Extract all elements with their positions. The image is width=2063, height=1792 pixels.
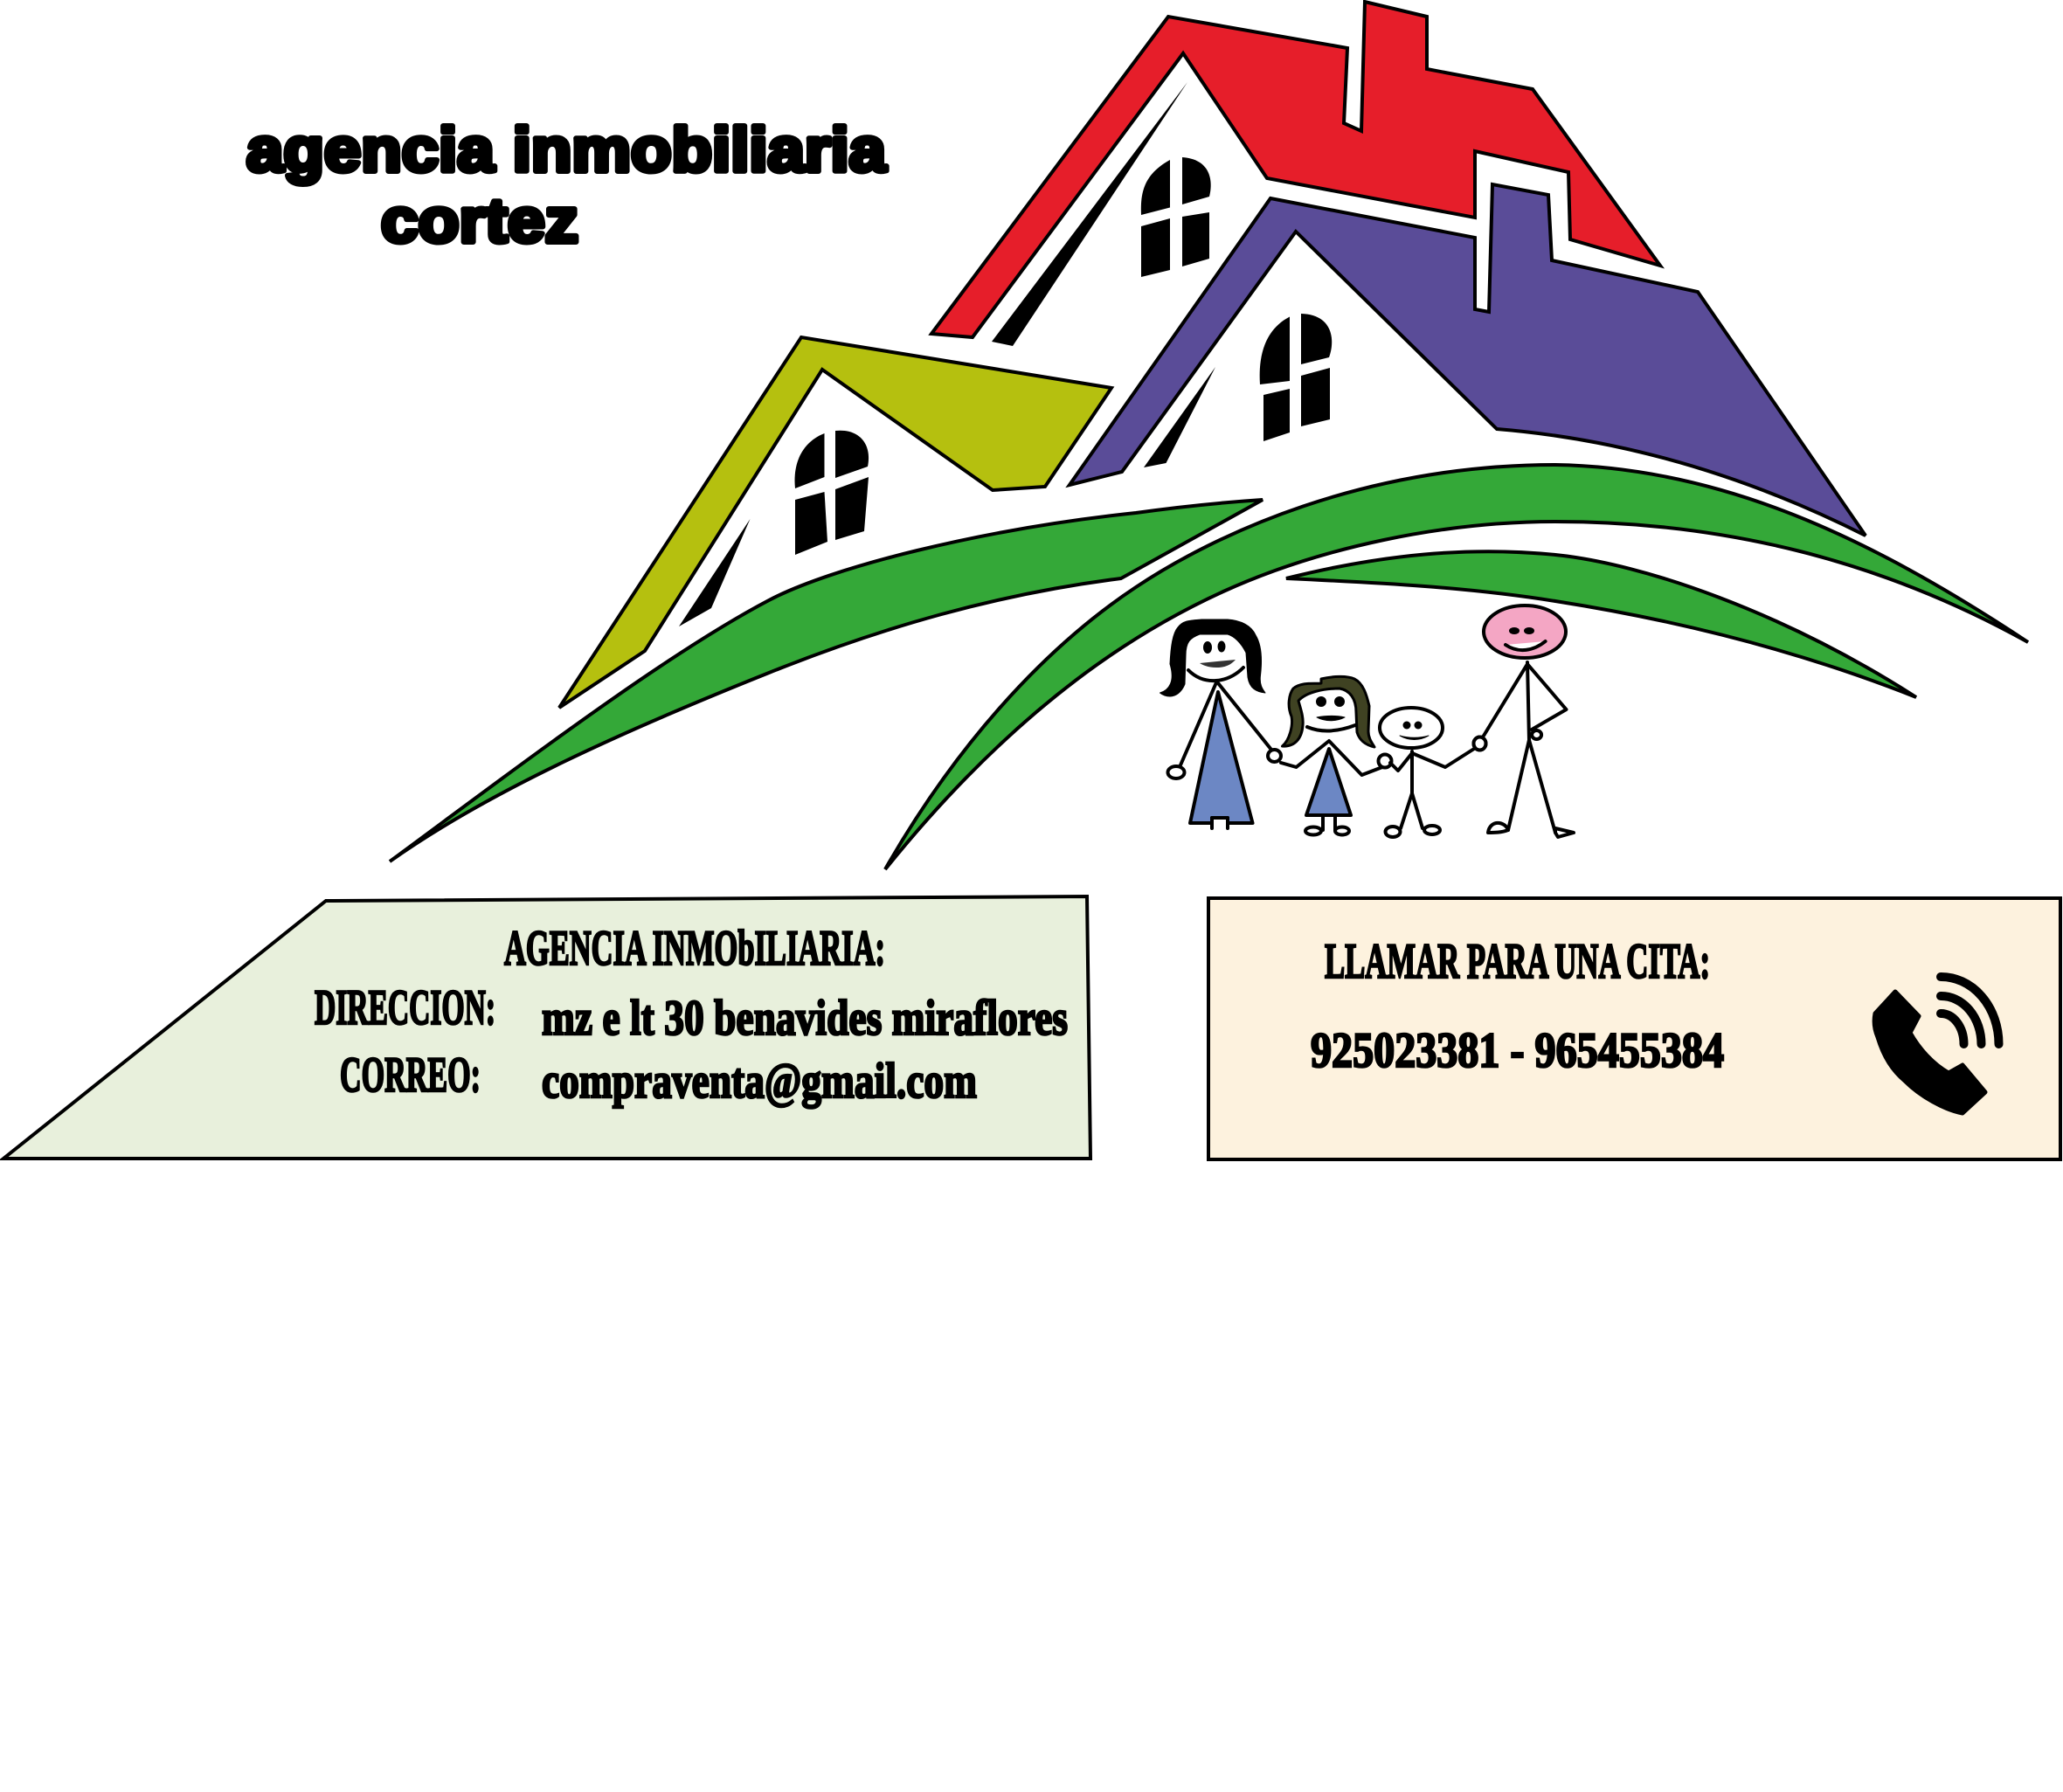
title: agencia inmobiliaria cortez [246, 116, 887, 256]
figure: mother [1160, 619, 1281, 828]
large central green arc [885, 465, 2028, 869]
olive house attic detail [679, 519, 750, 626]
window: purple house [1260, 314, 1332, 441]
house illustration [559, 2, 1866, 708]
panel: address [3, 896, 1090, 1159]
title: agencia inmobiliaria cortez: agencia inmobiliaria [246, 116, 887, 185]
window: olive house [795, 431, 869, 555]
figure: girl [1281, 676, 1391, 835]
olive roof [559, 337, 1111, 708]
panel: phone contact [1208, 898, 2060, 1159]
text: address value: mz e lt 30 benavides miraflores [542, 991, 1068, 1046]
icon: telephone with signal waves [1874, 977, 1999, 1113]
heading: agencia inmobiliaria: AGENCIA INMObILIARIA: [504, 921, 885, 976]
text: phone numbers: 925023381 - 965455384 [1311, 1023, 1724, 1078]
label: correo: CORREO: [340, 1048, 481, 1103]
label: direccion: DIRECCION: [315, 980, 495, 1035]
small right green arc [1286, 551, 1916, 697]
purple house attic detail [1144, 367, 1215, 467]
purple roof [1070, 184, 1866, 536]
left green arc [390, 500, 1263, 861]
title: agencia inmobiliaria cortez: cortez [381, 187, 578, 256]
green hills [390, 465, 2028, 869]
red roof [931, 2, 1660, 337]
heading: llamar para una cita: LLAMAR PARA UNA CITA: [1325, 934, 1710, 989]
family illustration [1160, 605, 1574, 837]
red house attic detail [992, 82, 1187, 346]
figure: boy [1380, 708, 1485, 837]
text: email value: compraventa@gmail.com [542, 1054, 977, 1109]
window: red house [1141, 157, 1211, 277]
figure: father [1473, 605, 1574, 837]
